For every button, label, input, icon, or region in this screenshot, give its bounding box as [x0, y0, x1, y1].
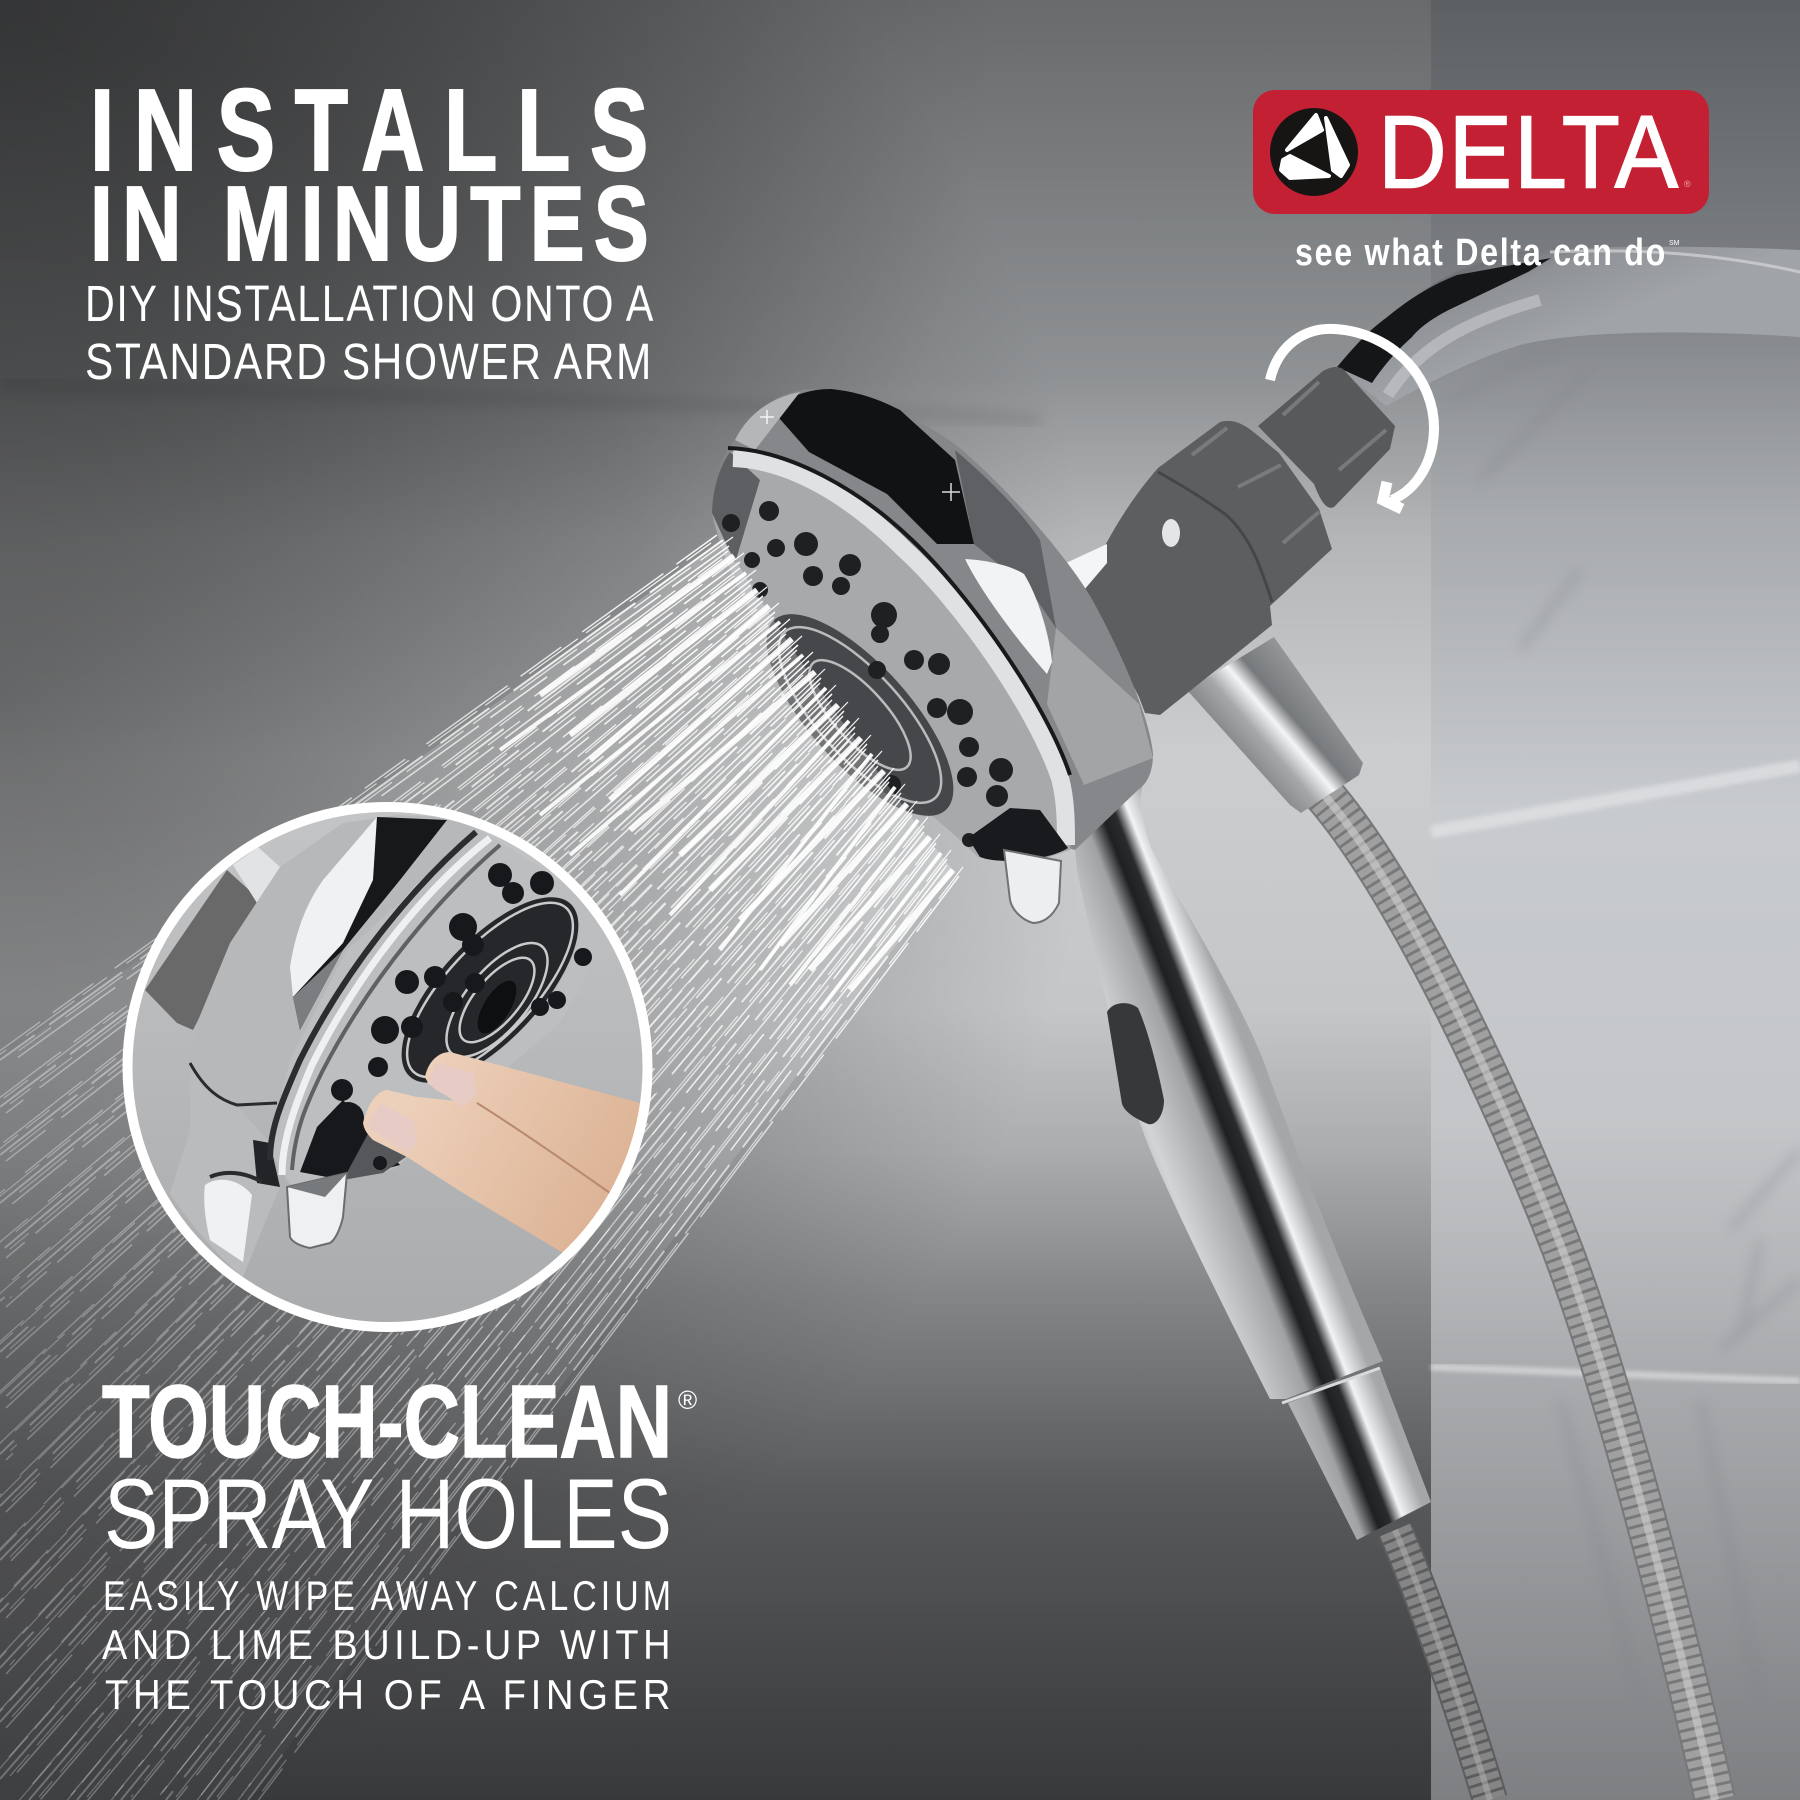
text: DIY installation: STANDARD SHOWER ARM: [85, 333, 653, 390]
highlight sparkle: [760, 410, 960, 501]
text: touch-clean description: EASILY WIPE AWAY CALCIUM: [103, 1572, 675, 1619]
background: bathroom wall: [0, 0, 1431, 1800]
heading: installs in minutes: INSTALLS: [90, 65, 668, 195]
heading: touch-clean spray holes: SPRAY HOLES: [104, 1458, 672, 1569]
wordmark: DELTA: [1378, 94, 1680, 210]
hose: lower from handle: [1395, 1530, 1490, 1800]
text: DIY installation: DIY INSTALLATION ONTO A: [85, 275, 655, 332]
hose: main: [1320, 790, 1715, 1800]
text: touch-clean description: [102, 1572, 675, 1718]
clip tab: [1004, 850, 1061, 923]
handle in close-up: [170, 1140, 280, 1276]
fingers: [363, 1052, 650, 1253]
logo: Delta red badge: [1253, 90, 1709, 214]
head shell in close-up: [198, 815, 480, 1020]
heading: touch-clean spray holes: [102, 1364, 697, 1569]
finger nails: [427, 1063, 477, 1107]
spray holes: [722, 501, 1013, 847]
rotation arrow: [1270, 329, 1434, 509]
bright streaks near head: [500, 556, 953, 1010]
shower head: [712, 389, 1153, 923]
heading: installs in minutes: [90, 65, 668, 283]
icon: spray-mode button: [1107, 1003, 1164, 1124]
shower arm: [1337, 247, 1800, 406]
handle of shower head: [1070, 750, 1431, 1540]
text: touch-clean description: THE TOUCH OF A FINGER: [105, 1671, 675, 1718]
mount bracket in close-up: [145, 870, 260, 1030]
tagline: SM: [1669, 240, 1680, 247]
text: touch-clean description: AND LIME BUILD-UP WITH: [102, 1621, 675, 1668]
heading: touch-clean spray holes: TOUCH-CLEAN: [102, 1364, 672, 1479]
inset circle: touch-clean close-up: [128, 807, 650, 1327]
clip tab in close-up: [287, 1173, 347, 1248]
face plate: [712, 452, 1072, 860]
chrome rim: [733, 458, 1066, 845]
water spray: [0, 535, 963, 1800]
chrome hose holder: [1187, 637, 1363, 813]
heading: installs in minutes: IN MINUTES: [90, 165, 658, 283]
tagline: see what Delta can do: [1295, 232, 1667, 274]
nozzle rosette: [737, 586, 983, 844]
back shell: [712, 389, 1153, 850]
grey swivel mount: [1066, 367, 1395, 715]
icon: Delta triangle mark: [1270, 108, 1358, 196]
logo: Delta red badge: ®: [1684, 179, 1691, 189]
text: DIY installation: [85, 275, 655, 390]
face plate in close-up: [274, 1106, 407, 1185]
inset white ring: [128, 807, 648, 1327]
holes in close-up: [331, 863, 592, 1170]
rosette in close-up: [402, 897, 578, 1083]
heading: touch-clean spray holes: ®: [678, 1385, 697, 1415]
background: marble tile wall: [1431, 0, 1800, 1800]
